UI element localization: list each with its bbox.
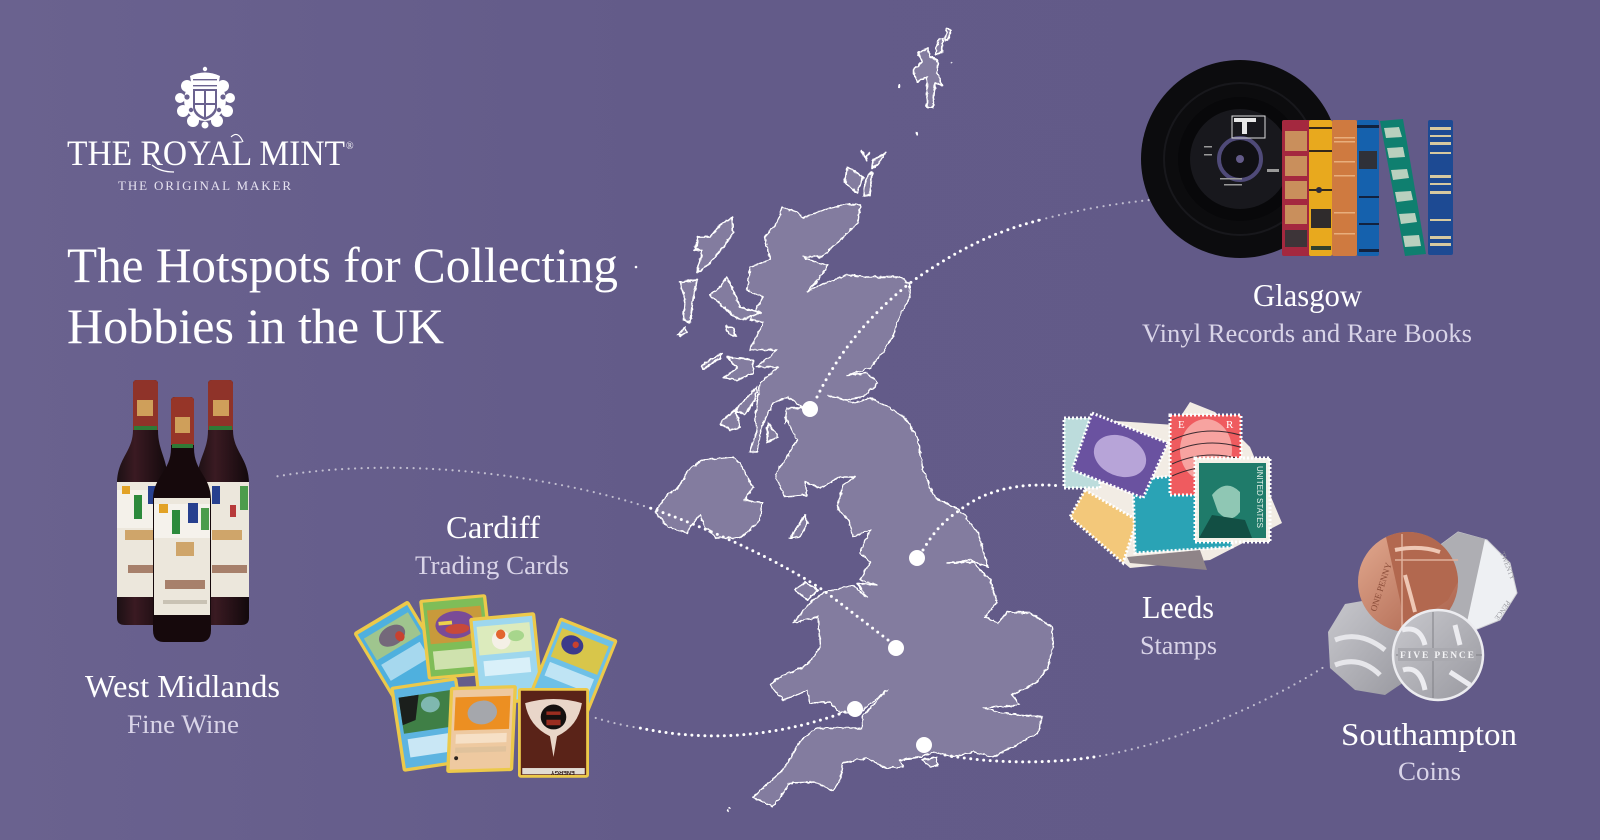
Shetland <box>913 29 951 107</box>
Inner Hebrides <box>702 277 778 442</box>
tagline: THE ORIGINAL MAKER <box>118 178 291 193</box>
illustration: wine bottles <box>117 380 249 642</box>
teal book <box>1380 119 1426 256</box>
label: Glasgow: Vinyl Records and Rare Books <box>1142 319 1472 348</box>
Anglesey <box>795 582 818 600</box>
route: Leeds <box>923 485 1062 550</box>
card: goldfish <box>469 612 544 706</box>
label: Cardiff: Cardiff <box>446 509 540 545</box>
title: Hobbies in the UK <box>67 298 444 354</box>
card: rock creature <box>446 685 517 773</box>
Orkney <box>845 150 885 196</box>
small islands <box>727 61 952 812</box>
label: Glasgow <box>1142 277 1472 348</box>
coin: five pence: FIVE PENCE <box>1400 651 1474 661</box>
label: Southampton: Southampton <box>1341 716 1517 752</box>
illustration: stamps <box>1064 402 1282 570</box>
label: Leeds: Stamps <box>1140 631 1217 660</box>
logo: The Royal Mint <box>67 67 354 193</box>
stamp: orange <box>1070 490 1137 563</box>
stamp: purple <box>1072 413 1168 498</box>
wordmark: THE ROYAL MINT <box>67 133 345 173</box>
illustration: trading cards <box>353 594 618 778</box>
bottle left <box>117 380 168 625</box>
label: Leeds: Leeds <box>1142 589 1214 625</box>
map of the UK <box>655 29 1053 812</box>
vinyl record <box>1141 60 1339 258</box>
icon: royal crest <box>175 67 235 128</box>
bottle right <box>197 380 249 625</box>
route: Southampton <box>945 665 1327 762</box>
label: West Midlands <box>85 668 280 739</box>
registered mark: ® <box>346 141 354 152</box>
coin: twenty pence right: TWENTY <box>1498 551 1517 581</box>
coin: twenty pence right <box>1420 532 1517 632</box>
Northern Ireland <box>655 457 762 538</box>
location dots <box>802 401 932 753</box>
wordmark swashes <box>152 134 243 172</box>
label: Cardiff: Trading Cards <box>415 551 569 580</box>
label: Cardiff <box>415 509 569 580</box>
label: Leeds <box>1140 589 1217 660</box>
label: Glasgow: Glasgow <box>1253 277 1362 313</box>
stamp: red <box>1170 415 1241 495</box>
yellow book <box>1309 120 1332 256</box>
label: Southampton <box>1341 716 1517 786</box>
stamp: pale blue <box>1064 418 1100 488</box>
red book <box>1282 120 1311 256</box>
card: green snake <box>419 594 495 680</box>
illustration: vinyl record and books <box>1141 60 1453 258</box>
coin: one penny <box>1358 532 1458 632</box>
stamp: red: E <box>1178 419 1185 431</box>
Great Britain mainland <box>747 204 1053 807</box>
stamp: green: UNITED STATES <box>1255 466 1264 528</box>
title: The Hotspots for Collecting <box>67 237 618 293</box>
coin: twenty pence left <box>1328 597 1410 695</box>
bottle centre <box>153 397 211 642</box>
title <box>67 237 637 354</box>
label: Southampton: Coins <box>1398 757 1461 786</box>
Isle of Man <box>790 515 808 538</box>
card: purple creature <box>528 617 618 721</box>
stamp: red: R <box>1226 419 1234 431</box>
stamp: teal <box>1133 470 1232 553</box>
coin: twenty pence right: PENCE <box>1493 599 1512 622</box>
illustration: coins <box>1328 532 1517 700</box>
route: Glasgow <box>817 200 1150 397</box>
card: seahorse <box>390 677 470 772</box>
dotted routes <box>273 200 1327 762</box>
coin: five pence <box>1393 610 1483 700</box>
label: West Midlands: Fine Wine <box>127 710 239 739</box>
card: energy <box>518 688 589 778</box>
stamp: paper backing <box>1070 402 1282 568</box>
card: blue shell <box>353 600 458 716</box>
route: West Midlands <box>273 468 888 640</box>
route: Cardiff <box>592 712 845 736</box>
stamp: green <box>1195 458 1270 542</box>
blue book <box>1357 120 1379 256</box>
Isle of Wight <box>922 757 938 767</box>
card: energy: ENERGY <box>551 769 575 775</box>
stamp: bottom grey <box>1127 550 1207 570</box>
orange book <box>1332 120 1357 256</box>
label: West Midlands: West Midlands <box>85 668 280 704</box>
dark blue book <box>1428 120 1453 255</box>
Outer Hebrides <box>678 217 733 336</box>
coin: one penny: ONE PENNY <box>1368 561 1394 613</box>
